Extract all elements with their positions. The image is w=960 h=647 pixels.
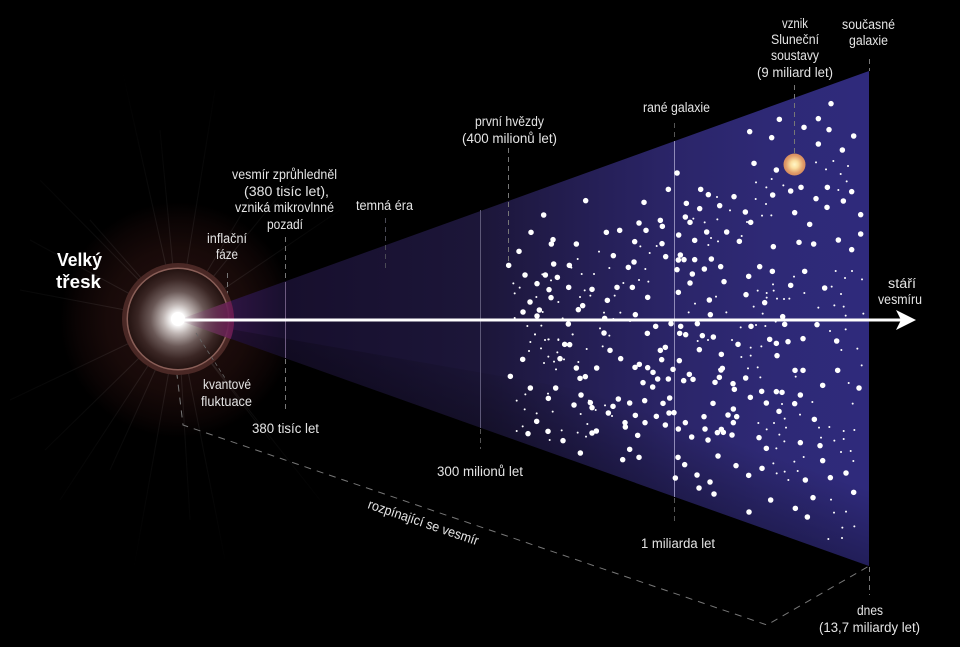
label: quantum fluctuations: fluktuace — [201, 394, 252, 409]
label: age of the universe — [878, 276, 922, 307]
label: solar system formation: vznik — [782, 16, 808, 31]
label: inflation phase: inflační — [207, 231, 247, 246]
title: Big Bang: třesk — [56, 272, 102, 292]
label: present galaxies — [842, 17, 895, 48]
label: solar system formation: soustavy — [771, 48, 819, 63]
label: universe became transparent — [232, 167, 337, 232]
solar system sun — [784, 154, 806, 176]
label: today: (13,7 miliardy let) — [819, 620, 920, 635]
pink wedge — [178, 301, 234, 339]
label: present galaxies: současné — [842, 17, 895, 32]
label: age of the universe: stáří — [888, 276, 916, 291]
label: 300 million years: 300 milionů let — [437, 464, 523, 479]
label: present galaxies: galaxie — [849, 33, 888, 48]
label: age of the universe: vesmíru — [878, 292, 922, 307]
label: today — [819, 603, 920, 635]
expanding universe cone — [178, 71, 869, 566]
big bang halo — [60, 202, 296, 438]
stars — [509, 104, 863, 539]
label: early galaxies: rané galaxie — [643, 100, 710, 115]
label: solar system formation: Sluneční — [771, 32, 819, 47]
label: 380 thousand years: 380 tisíc let — [252, 421, 319, 436]
label: universe became transparent: vesmír zprůhledněl — [232, 167, 337, 182]
label: dark era: temná éra — [356, 198, 413, 213]
dashed leader lines — [228, 59, 870, 595]
label: universe became transparent: pozadí — [267, 217, 303, 232]
label: today: dnes — [857, 603, 883, 618]
label: quantum fluctuations — [201, 377, 252, 409]
star above early galaxies — [674, 170, 680, 176]
label: inflation phase: fáze — [216, 247, 238, 262]
label: 1 billion years: 1 miliarda let — [641, 536, 715, 551]
label: expanding universe: rozpínající se vesmír — [366, 497, 481, 548]
vertical marker lines — [286, 141, 674, 497]
light rays — [10, 60, 340, 590]
label: universe became transparent: (380 tisíc let), — [244, 184, 329, 199]
dashed line: quantum fluctuations — [196, 333, 225, 378]
big bang ring and core — [122, 263, 234, 375]
label: solar system formation — [757, 16, 833, 80]
label: quantum fluctuations: kvantové — [203, 377, 251, 392]
title: Big Bang: Velký — [57, 250, 102, 270]
label: inflation phase — [207, 231, 247, 262]
expanding universe perspective outline — [172, 333, 869, 625]
title: Big Bang — [56, 250, 102, 292]
label: first stars — [462, 114, 557, 146]
label: first stars: (400 milionů let) — [462, 131, 557, 146]
label: first stars: první hvězdy — [475, 114, 544, 129]
label: universe became transparent: vzniká mikrovlnné — [235, 200, 334, 215]
time arrow — [178, 310, 916, 330]
label: solar system formation: (9 miliard let) — [757, 65, 833, 80]
